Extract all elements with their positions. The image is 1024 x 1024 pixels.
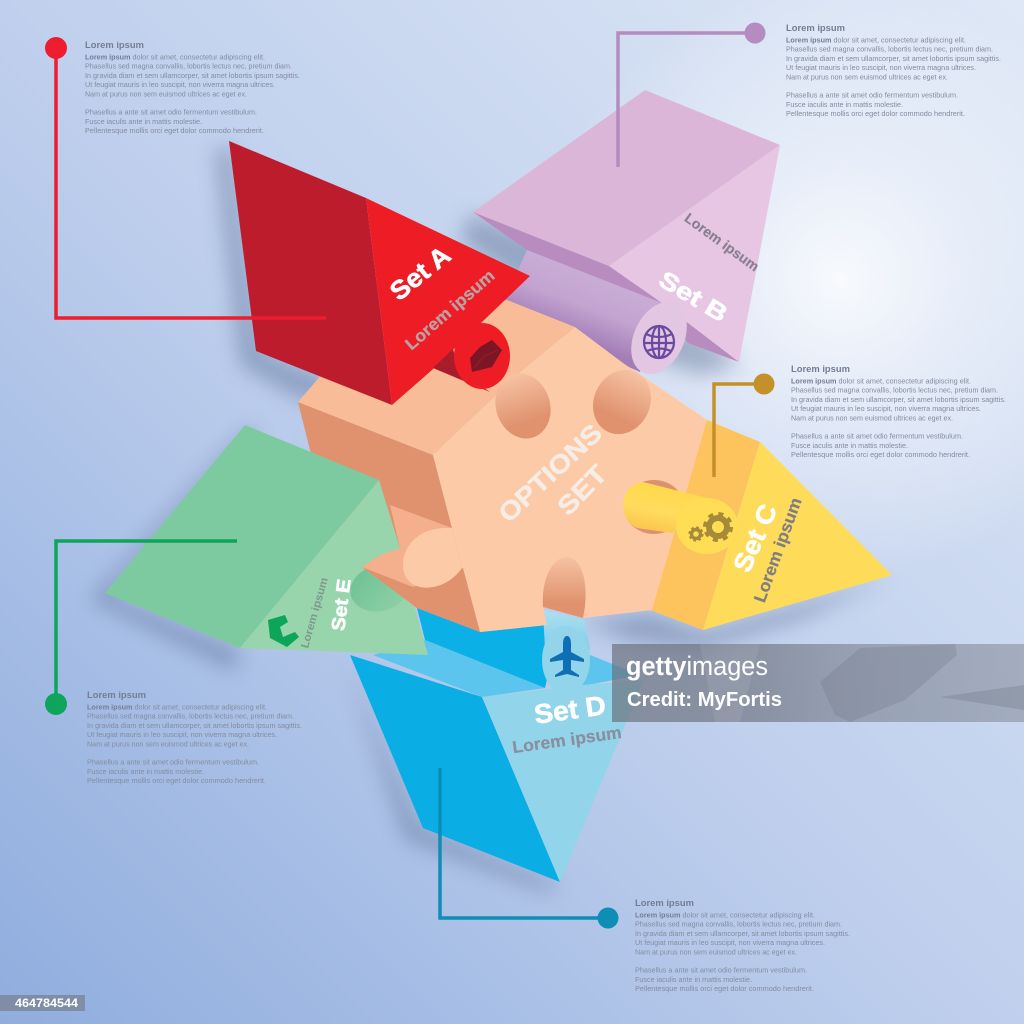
drop shadows <box>90 145 892 892</box>
central title: OPTIONS <box>492 418 608 528</box>
text block: set D: Lorem ipsum dolor sit amet, consectetur adipiscing elit. <box>635 910 815 920</box>
text block: set E: Pellentesque mollis orci eget dolor commodo hendrerit. <box>87 776 266 785</box>
text block: set B: Lorem ipsum dolor sit amet, consectetur adipiscing elit. <box>786 36 966 44</box>
callout line: set E <box>45 541 237 715</box>
text block: set E: Phasellus sed magna convallis, lobortis lectus nec, pretium diam. <box>87 712 294 721</box>
text block: set E <box>87 690 302 785</box>
set E label: Set E <box>328 578 356 632</box>
panel: central puzzle piece <box>298 300 707 632</box>
text block: set A: Fusce iaculis ante in mattis molestie. <box>85 117 202 126</box>
text block: set E: In gravida diam et sem ullamcorper, sit amet lobortis ipsum sagittis. <box>87 721 302 730</box>
text block: set E: Nam at purus non sem euismod ultrices ac eget ex. <box>87 739 249 748</box>
text block: set C: Phasellus a ante sit amet odio fermentum vestibulum. <box>791 432 963 441</box>
text block: set E: Ut feugiat mauris in leo suscipit, non viverra magna ultrices. <box>87 730 277 739</box>
hole: bottom <box>543 557 586 618</box>
text block: set A: In gravida diam et sem ullamcorper, sit amet lobortis ipsum sagittis. <box>85 71 300 80</box>
icon: plane <box>550 636 584 677</box>
icon: globe <box>644 326 674 358</box>
set E subtitle: Lorem ipsum <box>299 576 331 650</box>
set E arrow icon <box>268 615 299 647</box>
text block: set D: Nam at purus non sem euismod ultrices ac eget ex. <box>635 947 797 956</box>
text block: set B <box>786 23 1001 118</box>
set A subtitle: Lorem ipsum <box>402 266 498 354</box>
set A tab <box>454 323 510 389</box>
puzzle tab over set E <box>362 505 480 632</box>
icon: gears <box>690 514 731 540</box>
panel: set A red prism <box>229 141 530 405</box>
hole: upper right <box>583 360 661 444</box>
text block: set C: In gravida diam et sem ullamcorper, sit amet lobortis ipsum sagittis. <box>791 395 1006 404</box>
set B tab with globe <box>620 293 698 383</box>
callout line: set B <box>618 22 766 167</box>
text block: set A: Nam at purus non sem euismod ultrices ac eget ex. <box>85 89 247 98</box>
set D subtitle: Lorem ipsum <box>511 723 623 757</box>
text block: set C: Ut feugiat mauris in leo suscipit, non viverra magna ultrices. <box>791 404 981 413</box>
text block: set D: Phasellus a ante sit amet odio fermentum vestibulum. <box>635 966 807 975</box>
text block: set B: Lorem ipsum <box>786 23 845 33</box>
panel: set B purple prism <box>473 90 780 372</box>
set A fold <box>433 349 490 392</box>
text block: set E: Fusce iaculis ante in mattis molestie. <box>87 767 204 776</box>
text block: set B: Phasellus a ante sit amet odio fermentum vestibulum. <box>786 91 958 100</box>
set C label: Set C <box>727 499 783 577</box>
callout line: set D <box>440 768 618 928</box>
text block: set C: Pellentesque mollis orci eget dolor commodo hendrerit. <box>791 450 970 459</box>
text block: set D: Lorem ipsum <box>635 898 694 908</box>
text block: set E: Phasellus a ante sit amet odio fermentum vestibulum. <box>87 758 259 767</box>
icon: pen nib <box>470 340 502 372</box>
hole: upper left <box>487 366 559 446</box>
image id tag: 464784544 <box>15 996 78 1010</box>
callout line: set A <box>45 37 326 318</box>
watermark banner: Credit: MyFortis <box>627 689 782 711</box>
text block: set D: Pellentesque mollis orci eget dolor commodo hendrerit. <box>635 984 814 993</box>
text block: set D: Ut feugiat mauris in leo suscipit, non viverra magna ultrices. <box>635 938 825 947</box>
set E hole <box>345 558 415 618</box>
set D label: Set D <box>532 690 608 730</box>
watermark banner: gettyimages <box>626 651 768 681</box>
text block: set A: Lorem ipsum <box>85 40 144 50</box>
set B subtitle: Lorem ipsum <box>682 210 762 274</box>
set C subtitle: Lorem ipsum <box>750 495 806 605</box>
text block: set A: Phasellus a ante sit amet odio fermentum vestibulum. <box>85 108 257 117</box>
text block: set C: Nam at purus non sem euismod ultrices ac eget ex. <box>791 413 953 422</box>
text block: set B: Pellentesque mollis orci eget dolor commodo hendrerit. <box>786 109 965 118</box>
text block: set A: Phasellus sed magna convallis, lobortis lectus nec, pretium diam. <box>85 62 292 71</box>
text block: set A <box>85 40 300 135</box>
text block: set B: Ut feugiat mauris in leo suscipit, non viverra magna ultrices. <box>786 63 976 72</box>
text block: set A: Lorem ipsum dolor sit amet, consectetur adipiscing elit. <box>85 52 265 62</box>
set D tab with plane <box>542 626 590 694</box>
image id tag <box>0 995 85 1011</box>
panel: set C yellow prism <box>650 420 892 630</box>
text block: set C <box>791 364 1006 459</box>
text block: set A: Ut feugiat mauris in leo suscipit, non viverra magna ultrices. <box>85 80 275 89</box>
text block: set D: Fusce iaculis ante in mattis molestie. <box>635 975 752 984</box>
callout line: set C <box>714 374 774 477</box>
text block: set E: Lorem ipsum dolor sit amet, consectetur adipiscing elit. <box>87 702 267 712</box>
panel: set D blue prism <box>350 608 644 882</box>
set B cylinder <box>500 250 662 372</box>
set C rod and tab <box>623 482 738 554</box>
central title: SET <box>551 459 613 521</box>
text block: set C: Lorem ipsum <box>791 364 850 374</box>
set A label: Set A <box>384 239 456 306</box>
text block: set C: Lorem ipsum dolor sit amet, consectetur adipiscing elit. <box>791 376 971 386</box>
text block: set C: Fusce iaculis ante in mattis molestie. <box>791 441 908 450</box>
hole: right <box>624 480 684 534</box>
text block: set C: Phasellus sed magna convallis, lobortis lectus nec, pretium diam. <box>791 386 998 395</box>
text block: set D: Phasellus sed magna convallis, lobortis lectus nec, pretium diam. <box>635 920 842 929</box>
text block: set E: Lorem ipsum <box>87 690 146 700</box>
watermark banner <box>612 644 1024 722</box>
text block: set B: Phasellus sed magna convallis, lobortis lectus nec, pretium diam. <box>786 45 993 54</box>
text block: set B: Fusce iaculis ante in mattis molestie. <box>786 100 903 109</box>
text block: set A: Pellentesque mollis orci eget dolor commodo hendrerit. <box>85 126 264 135</box>
panel: set E green prism <box>105 425 428 655</box>
text block: set B: In gravida diam et sem ullamcorper, sit amet lobortis ipsum sagittis. <box>786 54 1001 63</box>
text block: set B: Nam at purus non sem euismod ultrices ac eget ex. <box>786 72 948 81</box>
text block: set D <box>635 898 850 993</box>
set B label: Set B <box>654 266 732 328</box>
text block: set D: In gravida diam et sem ullamcorper, sit amet lobortis ipsum sagittis. <box>635 929 850 938</box>
